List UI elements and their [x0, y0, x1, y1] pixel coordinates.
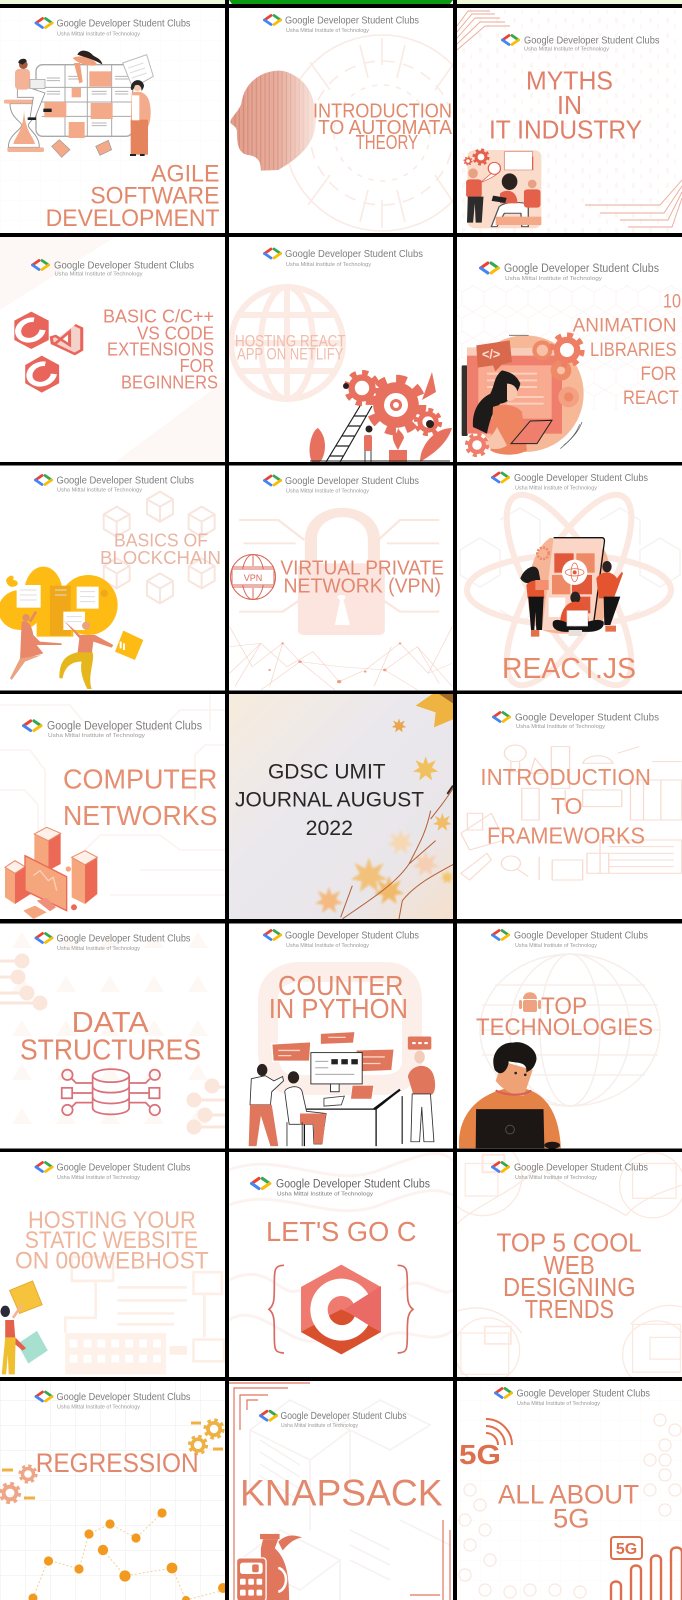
logo: Usha Mittal Institute of Technology	[277, 1192, 373, 1198]
faint tech sphere	[480, 954, 660, 1106]
icon: signal bars	[611, 1548, 682, 1600]
title: TECHNOLOGIES	[476, 1014, 653, 1041]
logo	[36, 1391, 190, 1411]
icon: VPN globe	[230, 554, 276, 600]
logo: Google Developer Student Clubs	[516, 1388, 650, 1400]
panel: let's go C	[229, 1152, 453, 1377]
title: DESIGNING	[503, 1272, 636, 1302]
corner lines	[229, 1383, 450, 1600]
logo	[492, 472, 648, 492]
logo	[36, 933, 190, 952]
title	[280, 556, 444, 598]
logo	[36, 18, 190, 38]
logo	[264, 930, 419, 949]
illustration: woman with panels	[0, 1281, 48, 1374]
title: WEB	[544, 1250, 595, 1280]
title: AGILE	[151, 161, 220, 188]
panel: all about 5G	[457, 1381, 682, 1600]
title: INTRODUCTION	[480, 764, 651, 790]
logo: Usha Mittal Institute of Technology	[515, 943, 598, 949]
title: ANIMATION	[573, 316, 677, 337]
title: REGRESSION	[36, 1448, 199, 1478]
icon: 5G signal	[459, 1419, 512, 1470]
title: SOFTWARE	[90, 182, 219, 210]
title: FRAMEWORKS	[487, 822, 645, 848]
faint isometric blocks	[240, 1400, 450, 1600]
title: VS CODE	[137, 322, 214, 343]
title	[313, 100, 453, 154]
title: APP ON NETLIFY	[237, 345, 344, 363]
logo: Google Developer Student Clubs	[285, 930, 419, 942]
title	[235, 333, 346, 363]
logo: Google Developer Student Clubs	[285, 15, 419, 27]
logo	[492, 1162, 648, 1181]
illustration: team at kanban board	[4, 51, 153, 157]
logo: Google Developer Student Clubs	[515, 712, 659, 724]
logo: Google Developer Student Clubs	[56, 1162, 190, 1174]
title: IN	[557, 90, 582, 120]
logo: Google Developer Student Clubs	[56, 1391, 190, 1403]
title: EXTENSIONS	[107, 339, 214, 360]
title: NETWORK (VPN)	[284, 575, 441, 598]
logo: Usha Mittal Institute of Technology	[57, 32, 141, 38]
circuit lines	[457, 11, 682, 227]
logo: Google Developer Student Clubs	[280, 1411, 406, 1422]
logo	[36, 1162, 190, 1181]
logo: Google Developer Student Clubs	[514, 472, 648, 484]
logo: Google Developer Student Clubs	[514, 930, 648, 942]
logo: Usha Mittal Institute of Technology	[48, 733, 145, 739]
illustration: person with laptop	[459, 1042, 561, 1149]
title: ALL ABOUT	[498, 1480, 639, 1510]
panel: basics of blockchain	[0, 466, 225, 690]
panel: regression	[0, 1381, 225, 1600]
logo: Usha Mittal Institute of Technology	[517, 1401, 601, 1407]
faint circuit traces	[0, 694, 225, 895]
logo: Google Developer Student Clubs	[276, 1178, 430, 1190]
radar background	[284, 35, 480, 231]
title: HOSTING REACT	[235, 333, 346, 351]
chart: scatter line	[28, 1508, 228, 1600]
illustration: dotted head	[230, 71, 316, 171]
illustration: IT team	[466, 150, 541, 228]
icon: gears	[464, 150, 488, 165]
faint hex lines	[460, 508, 680, 622]
icon: C hexagon with braces	[269, 1265, 413, 1354]
faint code and keyboard	[65, 1257, 224, 1374]
title: VIRTUAL PRIVATE	[280, 556, 444, 579]
title: IT INDUSTRY	[489, 114, 642, 144]
logo: Google Developer Student Clubs	[285, 248, 423, 260]
logo	[252, 1178, 430, 1198]
title	[489, 65, 642, 144]
logo: Google Developer Student Clubs	[56, 18, 190, 30]
illustration: woman with tablet: </>	[482, 348, 500, 362]
icon: VPN globe: VPN	[244, 573, 262, 583]
illustration: servers and monitor	[5, 827, 97, 919]
title: THEORY	[356, 132, 418, 154]
logo: Usha Mittal Institute of Technology	[57, 1405, 141, 1411]
title: TO AUTOMATA	[318, 117, 453, 139]
panel: data structures	[0, 924, 225, 1148]
title: LET'S GO C	[266, 1216, 416, 1247]
icon: money bag and calculator	[237, 1534, 302, 1600]
logo	[264, 248, 423, 268]
illustration: woman with tablet	[462, 335, 584, 455]
title	[100, 530, 221, 568]
logo: Google Developer Student Clubs	[56, 933, 190, 945]
panel: top technologies	[457, 924, 682, 1148]
title: BASIC C/C++	[103, 305, 214, 326]
title: KNAPSACK	[240, 1473, 443, 1514]
title	[20, 1007, 201, 1067]
logo	[496, 1388, 650, 1407]
title: FOR	[180, 355, 214, 376]
panel: basic C/C++ vs code extensions	[0, 237, 225, 462]
logo: Google Developer Student Clubs	[285, 475, 419, 487]
title	[498, 1480, 639, 1533]
panel: counter in python	[229, 924, 453, 1148]
icon: database network	[62, 1069, 160, 1115]
logo: Usha Mittal Institute of Technology	[286, 262, 372, 268]
faint web design scallops	[443, 1137, 682, 1389]
illustration: phone and people	[520, 538, 623, 637]
panel: introduction to automata theory	[229, 8, 453, 233]
logo	[36, 474, 194, 494]
icon: gears	[467, 335, 582, 455]
title	[63, 763, 217, 831]
logo	[481, 263, 659, 282]
logo	[502, 34, 660, 52]
title: IN PYTHON	[269, 993, 408, 1024]
title: DATA	[72, 1007, 149, 1039]
title: STRUCTURES	[20, 1035, 201, 1067]
logo: Google Developer Student Clubs	[504, 263, 659, 275]
logo: Usha Mittal Institute of Technology	[515, 1175, 598, 1181]
faint blockchain cubes	[104, 492, 215, 603]
title	[15, 1207, 209, 1275]
title	[103, 305, 218, 392]
title: ON 000WEBHOST	[15, 1248, 209, 1275]
panel: hosting react app on netlify	[229, 237, 453, 462]
logo	[24, 721, 202, 739]
title: COUNTER	[278, 970, 404, 1001]
title: MYTHS	[526, 65, 613, 95]
faint line-art icons	[461, 745, 682, 880]
title	[269, 970, 408, 1024]
panel: react.js	[457, 466, 682, 690]
panel: myths in IT industry	[457, 8, 682, 233]
panel: hosting static website on 000webhost	[0, 1152, 225, 1377]
faint waves	[229, 1153, 453, 1341]
logo: Usha Mittal Institute of Technology	[505, 276, 602, 282]
title	[480, 764, 651, 848]
icon: android	[519, 992, 541, 1012]
title: TRENDS	[525, 1294, 614, 1324]
title: NETWORKS	[63, 800, 217, 831]
faint nodes	[0, 955, 225, 1133]
logo: Usha Mittal Institute of Technology	[515, 486, 598, 492]
title: TO	[551, 793, 583, 819]
title: JOURNAL AUGUST	[235, 789, 424, 812]
logo: Usha Mittal Institute of Technology	[57, 488, 143, 494]
faint python logo	[268, 972, 412, 1085]
icon: 5G badge: 5G	[616, 1541, 637, 1558]
decorative light rays	[0, 237, 225, 462]
icons: C++, VS Code, C hexagons	[13, 312, 82, 393]
illustration: autumn branches and leaves	[315, 694, 455, 919]
logo: Google Developer Student Clubs	[56, 474, 194, 486]
logo	[260, 1411, 406, 1429]
title: DEVELOPMENT	[46, 205, 220, 232]
logo: Usha Mittal Institute of Technology	[54, 272, 143, 278]
logo: Google Developer Student Clubs	[54, 260, 194, 272]
logo	[264, 15, 419, 34]
title: BLOCKCHAIN	[100, 547, 221, 568]
logo: Usha Mittal Institute of Technology	[524, 46, 610, 52]
logo	[492, 930, 648, 949]
title: TOP	[541, 993, 587, 1020]
logo	[264, 475, 419, 494]
panel: agile software development	[0, 8, 225, 233]
logo: Usha Mittal Institute of Technology	[57, 1175, 141, 1181]
illustration: gears, ladder, people	[310, 372, 452, 462]
icon: 5G signal: 5G	[459, 1439, 501, 1470]
logo: Usha Mittal Institute of Technology	[286, 488, 370, 494]
logo: Usha Mittal Institute of Technology	[286, 28, 370, 34]
title: COMPUTER	[63, 763, 217, 794]
title: TOP 5 COOL	[496, 1228, 642, 1258]
illustration: team at computer desk	[249, 1032, 435, 1146]
title: HOSTING YOUR	[28, 1207, 196, 1234]
logo: Google Developer Student Clubs	[514, 1162, 648, 1174]
title: GDSC UMIT	[268, 760, 386, 783]
title	[573, 291, 681, 409]
panel: computer networks	[0, 694, 225, 919]
icons: gears	[1, 1420, 223, 1502]
panel: introduction to frameworks	[457, 694, 682, 919]
logo: Usha Mittal Institute of Technology	[57, 946, 141, 952]
title	[46, 161, 220, 232]
title: STATIC WEBSITE	[25, 1227, 198, 1254]
logo: Google Developer Student Clubs	[524, 34, 660, 46]
title	[476, 993, 653, 1041]
title: REACT.JS	[502, 653, 636, 685]
logo	[32, 260, 194, 278]
logo: Usha Mittal Institute of Technology	[286, 943, 370, 949]
faint network nodes	[459, 1414, 681, 1598]
faint react atom	[467, 478, 671, 702]
faint globe	[231, 287, 343, 399]
title	[235, 760, 424, 840]
logo	[494, 712, 659, 730]
panel: knapsack	[229, 1381, 453, 1600]
illustration: people carrying documents	[0, 567, 143, 689]
title: FOR	[640, 364, 676, 385]
panel: 10 animation libraries for react	[457, 237, 682, 462]
icon: 5G badge	[611, 1537, 642, 1559]
title: 5G	[553, 1503, 590, 1533]
panel: top 5 cool web designing trends	[457, 1152, 682, 1377]
logo: Usha Mittal Institute of Technology	[516, 724, 606, 730]
title: 2022	[306, 817, 353, 840]
top strip: previous row remnant	[0, 0, 682, 4]
title: INTRODUCTION	[313, 100, 452, 122]
title: BASICS OF	[114, 530, 208, 551]
panel: virtual private network	[229, 466, 453, 690]
faint padlock and circuit	[230, 512, 452, 690]
logo: Google Developer Student Clubs	[47, 721, 202, 733]
title	[496, 1228, 642, 1324]
panel: GDSC UMIT journal August 2022	[229, 694, 453, 919]
logo: Usha Mittal Institute of Technology	[281, 1423, 359, 1429]
